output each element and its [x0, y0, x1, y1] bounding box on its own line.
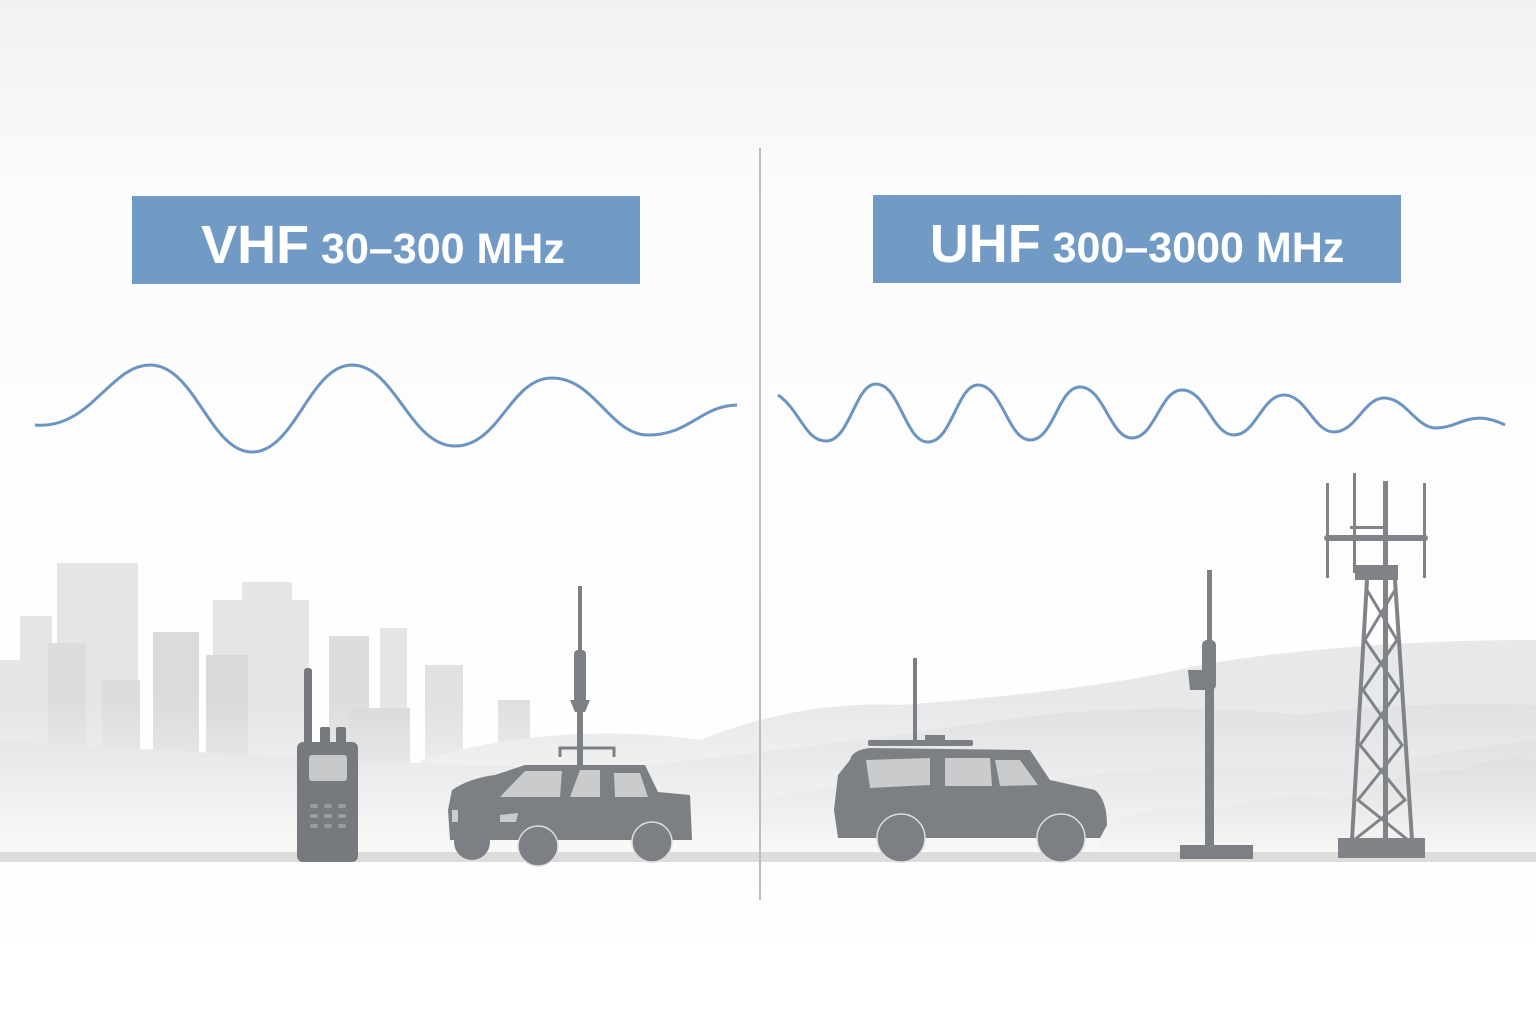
icon: pickup truck with antenna	[448, 586, 692, 866]
icon: lattice tower	[1324, 473, 1428, 858]
icon: SUV with antenna	[834, 658, 1107, 862]
ground line	[0, 852, 1536, 862]
icon: antenna pole	[1180, 570, 1253, 859]
UHF banner	[873, 195, 1401, 283]
VHF banner: VHF 30–300 MHz	[201, 215, 565, 275]
divider	[759, 148, 761, 900]
VHF banner	[132, 196, 640, 284]
hills	[0, 640, 1536, 860]
VHF wave	[35, 365, 737, 452]
UHF banner: UHF 300–3000 MHz	[930, 214, 1344, 274]
icon: handheld radio	[297, 668, 358, 862]
city skyline	[0, 563, 530, 853]
UHF wave	[778, 384, 1505, 442]
